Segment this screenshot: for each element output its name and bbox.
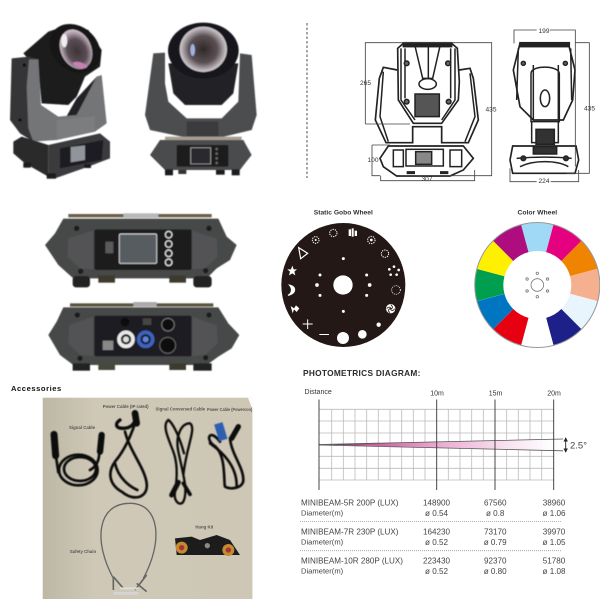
accessory labels: Signal Conversed Cable xyxy=(156,407,206,412)
chart: color wheel xyxy=(469,217,600,353)
row: MINIBEAM-10R xyxy=(301,556,566,576)
row: MINIBEAM-10R: 92370 xyxy=(484,556,507,566)
row: MINIBEAM-7R: Diameter(m) xyxy=(301,538,344,546)
dimension labels: front view xyxy=(360,80,497,183)
photo: moving head angled view xyxy=(10,14,110,179)
row: MINIBEAM-10R: ø 0.52 xyxy=(425,567,448,576)
row: MINIBEAM-5R: 67560 xyxy=(484,498,507,508)
accessory labels: Safety Chain xyxy=(70,549,96,554)
dimension labels: side view: 435 xyxy=(584,106,595,112)
row: MINIBEAM-10R: ø 1.08 xyxy=(543,567,566,576)
cables from the accessory photo xyxy=(54,413,243,504)
row: MINIBEAM-7R xyxy=(301,528,566,547)
row: MINIBEAM-7R: ø 1.05 xyxy=(543,538,566,547)
row: MINIBEAM-10R: 223430 xyxy=(423,556,450,566)
dimension labels: side view: 224 xyxy=(538,178,550,185)
row: MINIBEAM-10R: ø 0.80 xyxy=(484,567,507,576)
heading: accessories: Accessories xyxy=(11,384,62,393)
axis labels: 10m xyxy=(430,390,444,398)
beam angle callout xyxy=(564,437,587,453)
chart: photometrics grid and beam xyxy=(319,400,563,490)
row: MINIBEAM-5R xyxy=(301,498,566,518)
accessory labels xyxy=(69,404,253,554)
row: MINIBEAM-10R: Diameter(m) xyxy=(301,566,344,576)
diagram: front dimensions drawing xyxy=(365,43,492,181)
row: MINIBEAM-5R: 148900 xyxy=(423,498,450,508)
row: MINIBEAM-5R: ø 1.06 xyxy=(543,509,566,518)
accessory labels: Hang Kit xyxy=(195,524,214,529)
row: MINIBEAM-10R: MINIBEAM-10R 280P (LUX) xyxy=(301,556,403,566)
photo: connector panel view xyxy=(48,302,239,371)
cable: signal converted cable xyxy=(166,420,192,504)
accessory labels: Power Cable (Powercon) xyxy=(207,407,253,412)
dimension labels: side view: 199 xyxy=(538,28,550,35)
beam angle callout: 2.5° xyxy=(570,440,587,452)
row: MINIBEAM-7R: MINIBEAM-7R 230P (LUX) xyxy=(301,528,399,536)
cable: powercon cable xyxy=(209,423,243,488)
heading: color wheel: Color Wheel xyxy=(517,210,557,216)
dimension labels: front view: 265 xyxy=(360,80,371,87)
dimension labels: front view: 100 xyxy=(367,157,379,164)
row: MINIBEAM-5R: Diameter(m) xyxy=(301,508,344,518)
dimension labels: front view: 435 xyxy=(485,106,497,114)
photo: control panel view xyxy=(45,213,237,287)
row: MINIBEAM-5R: ø 0.8 xyxy=(486,509,505,518)
row: MINIBEAM-5R: 38960 xyxy=(543,498,566,508)
row: MINIBEAM-10R: 51780 xyxy=(543,556,566,566)
dimension labels: side view xyxy=(538,28,595,185)
accessory labels: Signal Cable xyxy=(69,425,96,430)
row: MINIBEAM-7R: 39970 xyxy=(543,528,566,536)
heading: photometrics diagram: PHOTOMETRICS DIAGRAM: xyxy=(303,368,421,378)
row: MINIBEAM-7R: ø 0.79 xyxy=(484,538,507,547)
row: MINIBEAM-7R: ø 0.52 xyxy=(425,538,448,547)
heading: static gobo wheel: Static Gobo Wheel xyxy=(314,210,373,216)
diagram: side dimensions drawing xyxy=(510,30,589,182)
table: lux and diameter values xyxy=(301,498,566,576)
row: MINIBEAM-5R: MINIBEAM-5R 200P (LUX) xyxy=(301,498,399,508)
axis labels: Distance xyxy=(304,389,332,396)
accessory labels: Power Cable (IP rated) xyxy=(103,404,149,409)
cable: power cable IP rated xyxy=(110,413,147,497)
row: MINIBEAM-7R: 164230 xyxy=(423,528,450,536)
axis labels: 20m xyxy=(547,390,561,398)
photo: accessories xyxy=(43,398,253,599)
axis labels xyxy=(304,389,561,398)
photo: moving head front view xyxy=(145,23,257,175)
axis labels: 15m xyxy=(489,390,502,398)
dimension labels: front view: 307 xyxy=(421,176,433,183)
row: MINIBEAM-7R: 73170 xyxy=(484,528,507,536)
cable: signal cable xyxy=(54,434,102,485)
safety chain and hang kit xyxy=(101,503,240,593)
chart: static gobo wheel xyxy=(281,223,405,347)
divider: dashed vertical line xyxy=(306,23,308,178)
row: MINIBEAM-5R: ø 0.54 xyxy=(425,509,448,518)
